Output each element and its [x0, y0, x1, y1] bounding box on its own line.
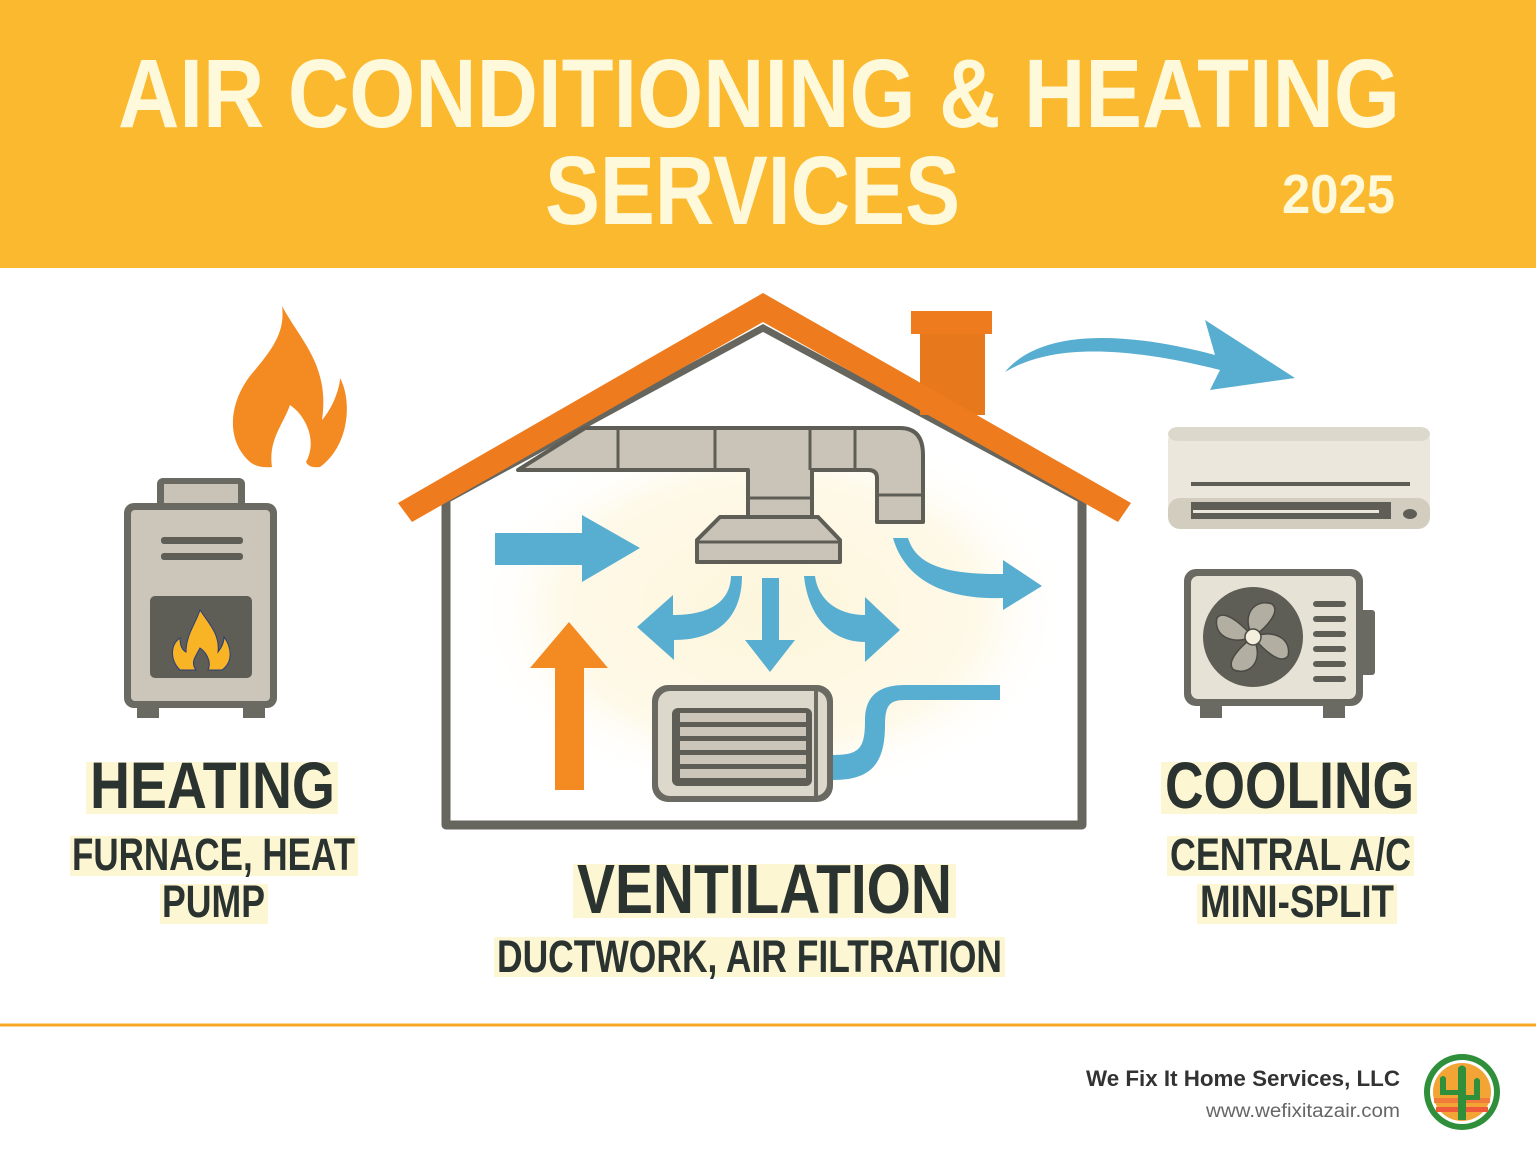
icon: furnace	[124, 478, 277, 718]
walls	[446, 498, 1082, 825]
ductwork	[518, 428, 923, 562]
label: cooling	[1161, 748, 1417, 927]
label: heating: PUMP	[162, 876, 265, 927]
label: ventilation: VENTILATION	[577, 850, 952, 928]
arrows: blue airflow	[495, 515, 1042, 780]
roof	[398, 293, 1131, 522]
year: 2025	[1282, 163, 1395, 225]
logo	[1424, 1054, 1500, 1130]
icon: big flame	[233, 306, 347, 467]
icon: outdoor condenser unit	[1184, 569, 1375, 718]
return air unit	[652, 685, 833, 802]
footer: company name	[1086, 1066, 1400, 1122]
arrow: blue curved top	[1005, 320, 1295, 390]
label: cooling: CENTRAL A/C	[1170, 829, 1411, 880]
label: heating: FURNACE, HEAT	[72, 829, 355, 880]
icon: mini-split indoor unit	[1168, 427, 1430, 529]
glow	[470, 420, 1070, 800]
label: cooling: COOLING	[1165, 748, 1414, 822]
title: SERVICES	[545, 136, 960, 245]
house	[398, 293, 1131, 825]
icon: small flame	[172, 610, 230, 670]
footer: company name: We Fix It Home Services, LLC	[1086, 1066, 1400, 1091]
chimney	[911, 311, 992, 415]
diffuser	[697, 517, 840, 562]
label: cooling: MINI-SPLIT	[1200, 876, 1394, 927]
label: heating	[70, 748, 358, 927]
label: heating: HEATING	[90, 748, 335, 822]
footer: company name: www.wefixitazair.com	[1205, 1101, 1400, 1122]
arrow: orange heat up	[530, 622, 608, 790]
title	[118, 39, 1400, 245]
header banner	[0, 0, 1536, 268]
label: ventilation: DUCTWORK, AIR FILTRATION	[497, 931, 1002, 982]
label: ventilation	[494, 850, 1005, 982]
